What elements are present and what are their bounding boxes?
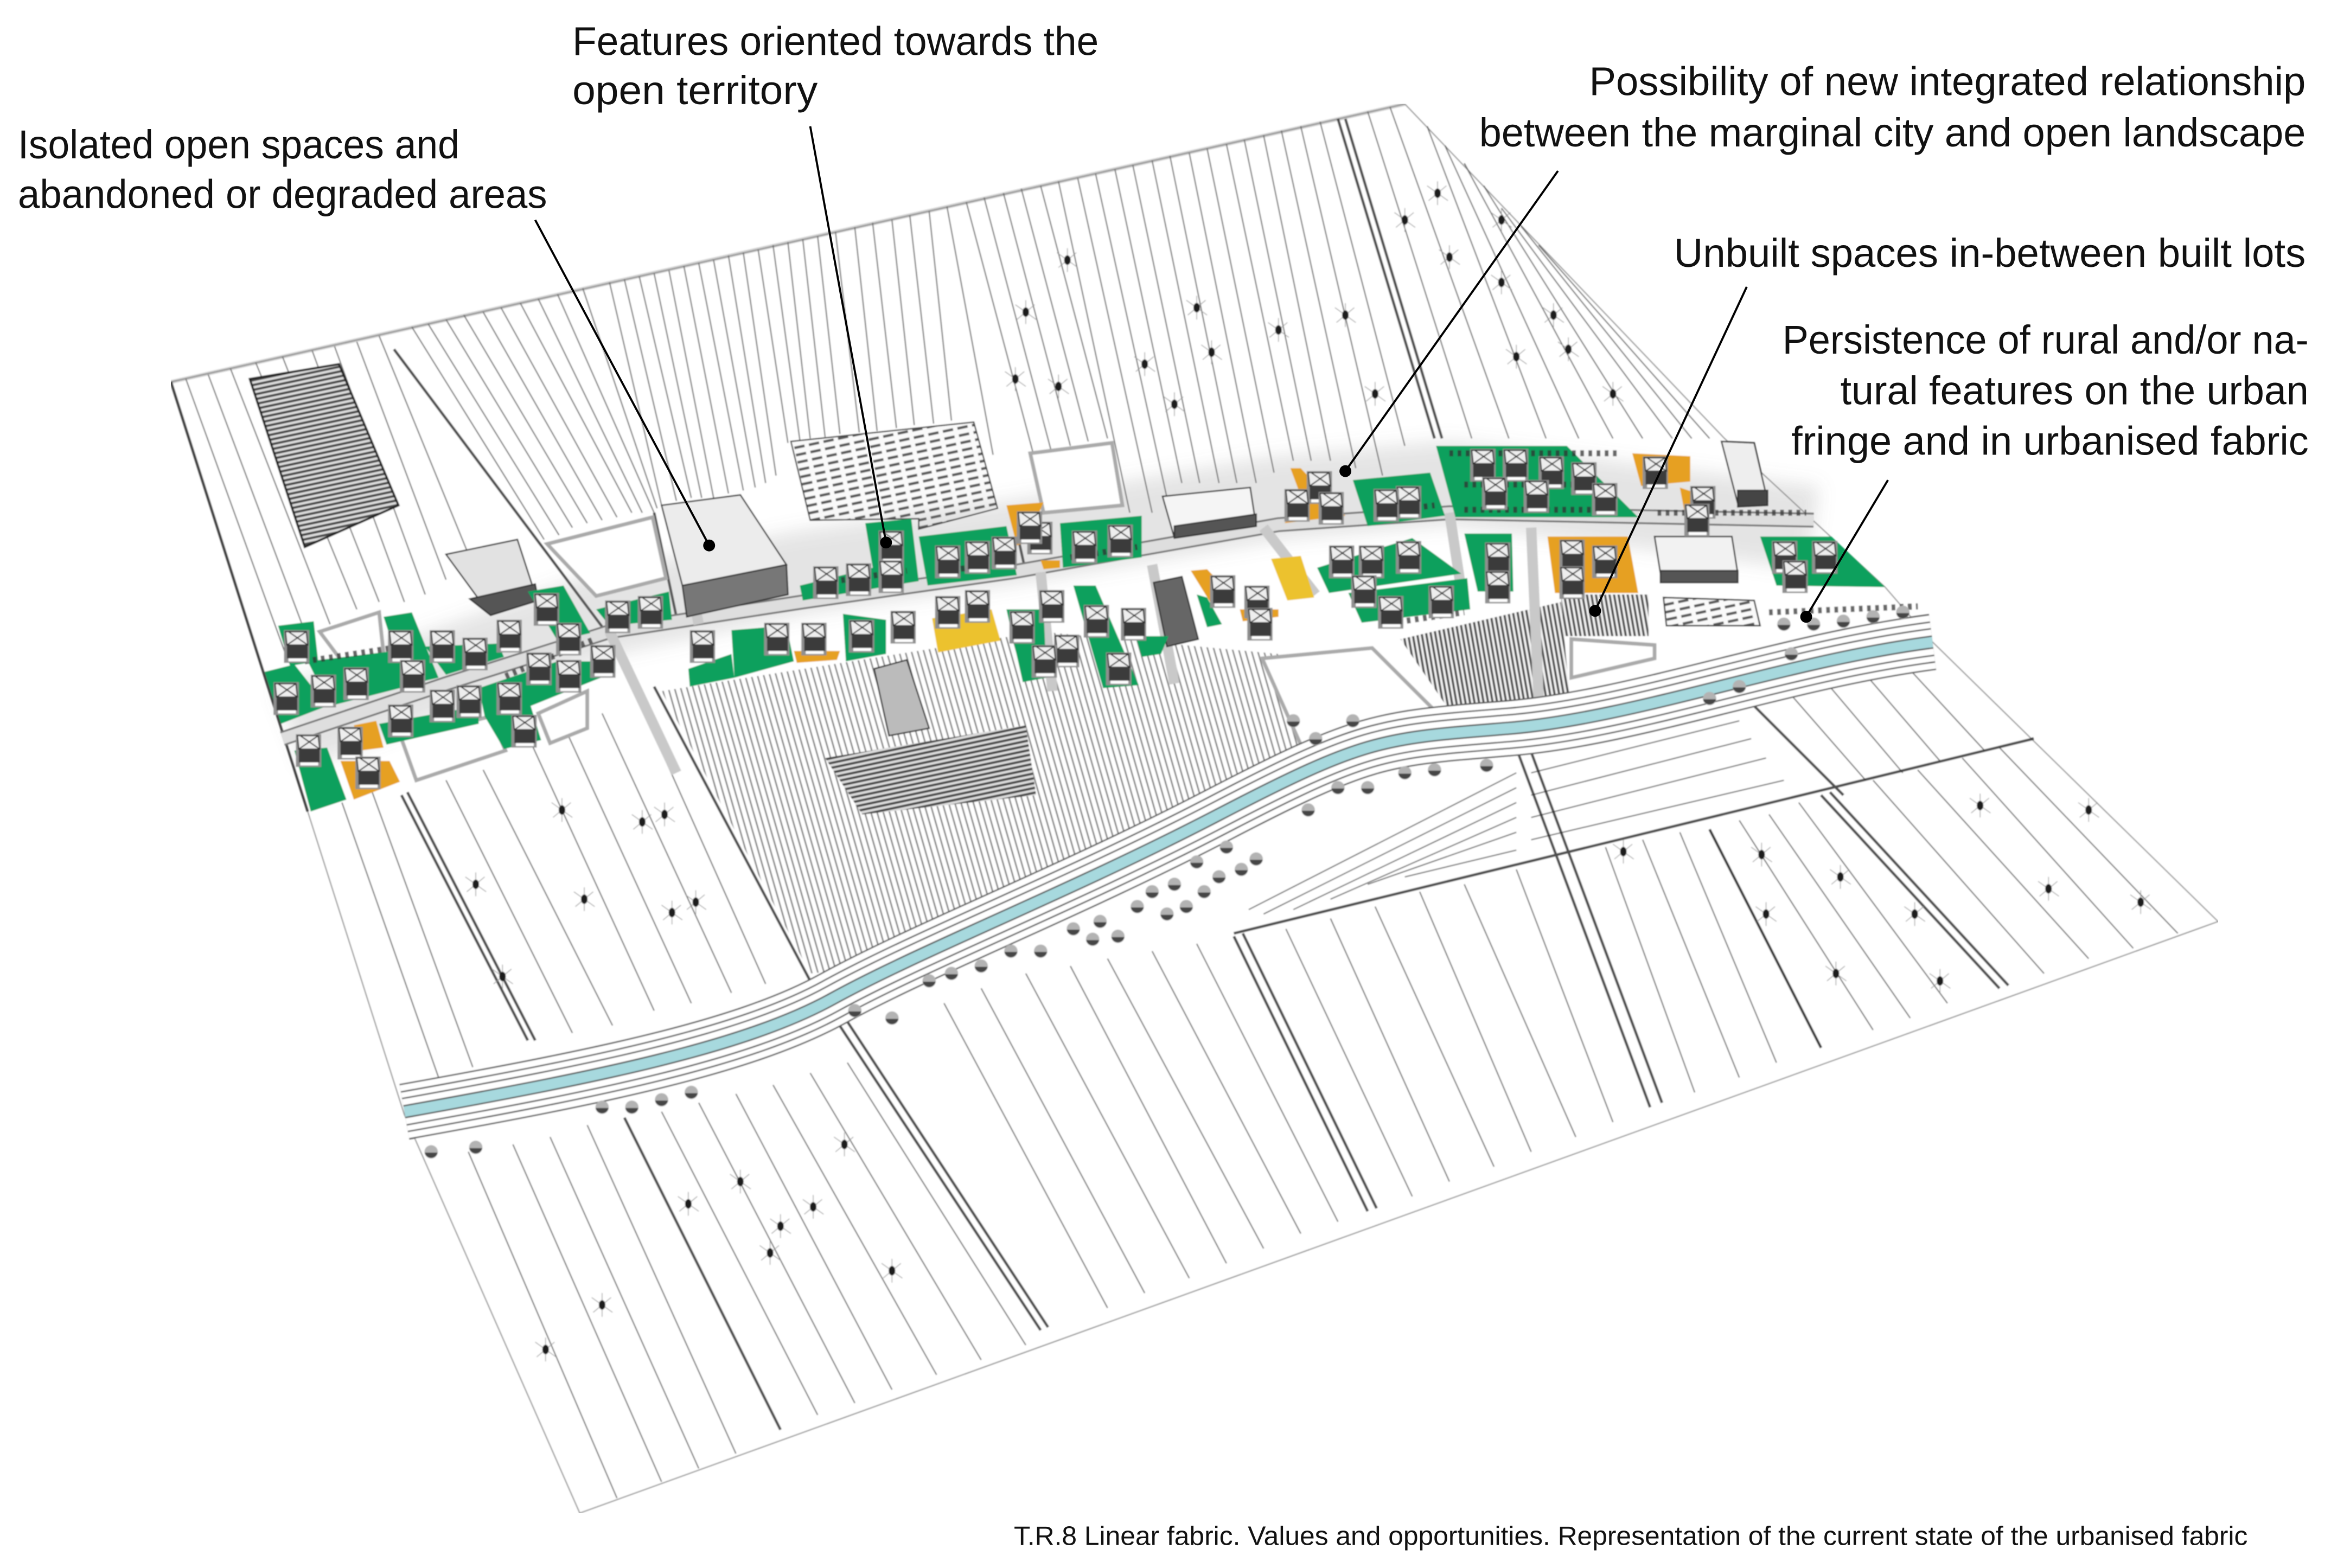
road system <box>283 513 1813 773</box>
south centre field lines <box>944 869 1613 1308</box>
callout: persistence of rural features <box>1783 317 2309 623</box>
land outline <box>171 104 2218 1513</box>
south-west field lines <box>342 701 1026 1498</box>
dense field east <box>1400 602 1572 713</box>
isolated field trees <box>465 181 2151 1361</box>
north dark roads <box>171 119 1442 811</box>
dark striped plot <box>825 725 1036 815</box>
callout: isolated open spaces <box>18 122 715 552</box>
yellow lots <box>932 556 1314 652</box>
map illustration <box>171 104 2218 1513</box>
central dense hatched fields <box>662 632 1308 974</box>
callout: unbuilt spaces <box>1589 231 2306 617</box>
callout: features oriented towards open territory <box>572 18 1099 548</box>
caption: T.R.8 Linear fabric. Values and opportunities. Representation of the current state of the urbanised fabric <box>1014 1521 2247 1551</box>
settlement grey haze <box>290 483 1813 728</box>
riverside trees <box>424 606 1909 1159</box>
striped plot north-west <box>250 364 399 547</box>
callout: features oriented towards open territory: Features oriented towards the <box>572 18 1099 63</box>
striped plot north <box>791 422 998 529</box>
callout: new integrated relationship <box>1339 59 2306 477</box>
callout: persistence of rural features: Persistence of rural and/or na- <box>1783 317 2309 362</box>
white open lots <box>320 443 1655 780</box>
callout: persistence of rural features: fringe and in urbanised fabric <box>1791 419 2309 464</box>
callout: unbuilt spaces: Unbuilt spaces in-between built lots <box>1674 231 2306 276</box>
canal and parallel tracks <box>404 642 1932 1112</box>
callout: new integrated relationship: between the marginal city and open landscape <box>1479 110 2306 155</box>
large buildings <box>446 441 1767 735</box>
callout: features oriented towards open territory: open territory <box>572 68 818 113</box>
orange lots <box>341 453 1709 799</box>
hedge and fence rows <box>305 453 1918 676</box>
houses <box>273 449 1837 789</box>
callout: new integrated relationship: Possibility of new integrated relationship <box>1589 59 2306 104</box>
callout: persistence of rural features: tural features on the urban <box>1841 368 2309 413</box>
north edge haze <box>171 104 1405 382</box>
dense field unbuilt <box>1561 594 1649 636</box>
callout: isolated open spaces: abandoned or degraded areas <box>18 172 547 217</box>
south-east field lines <box>1249 654 2178 1092</box>
green lots <box>265 446 1885 811</box>
north field lines <box>186 107 1709 654</box>
callout: isolated open spaces: Isolated open spaces and <box>18 122 459 167</box>
south dark roads <box>401 687 2034 1430</box>
